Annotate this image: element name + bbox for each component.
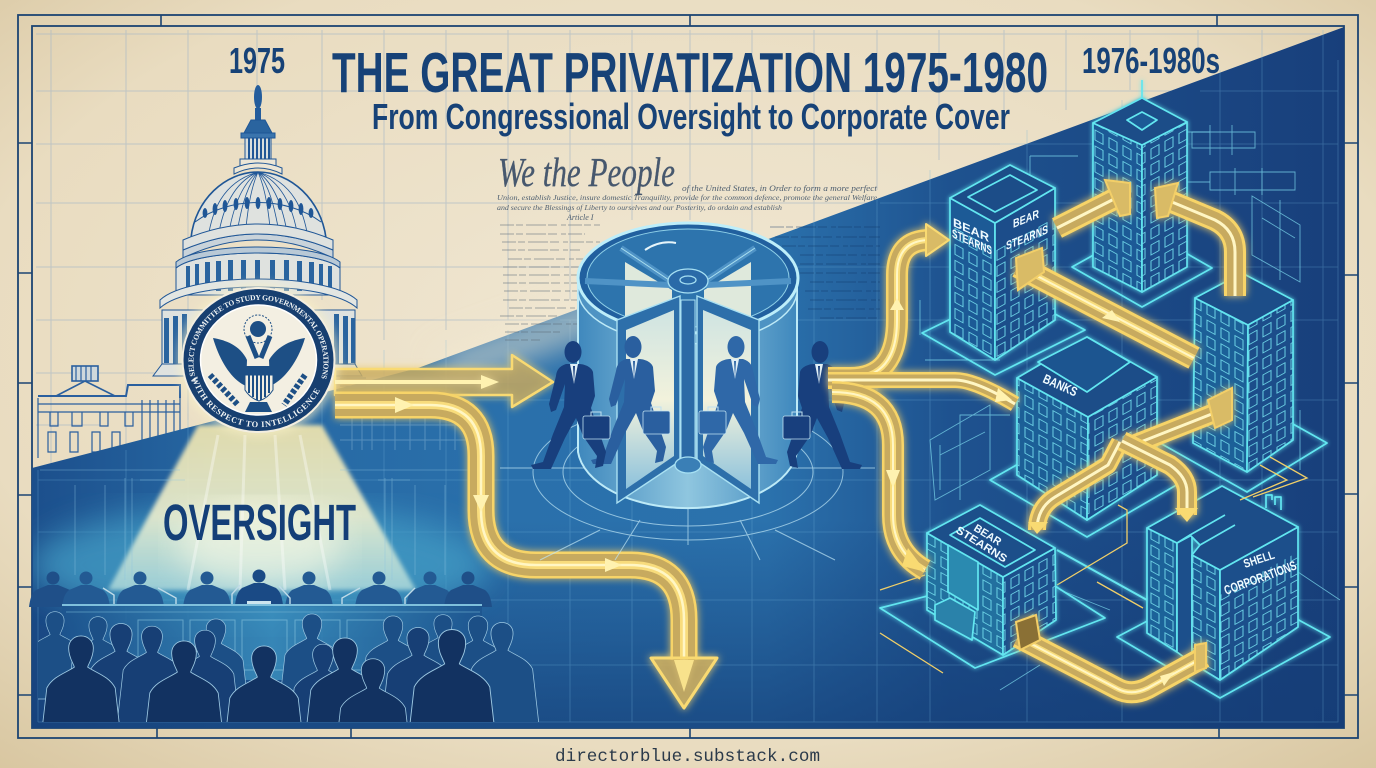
building: Bear Stearns upper bbox=[922, 165, 1085, 375]
document script lines: Article I bbox=[566, 213, 594, 222]
subtitle: From Congressional Oversight to Corporate Cover bbox=[372, 96, 1010, 137]
main dome bbox=[153, 172, 366, 386]
document script lines: and secure the Blessings of Liberty to ourselves and our Posterity, do ordain and establish bbox=[497, 203, 782, 212]
left door wing bbox=[617, 296, 680, 503]
label: Bear Stearns right face: BEAR bbox=[1013, 207, 1039, 231]
revolving door bbox=[500, 223, 875, 560]
seal ring text: WITH RESPECT TO INTELLIGENCE bbox=[192, 376, 320, 428]
OVERSIGHT label: OVERSIGHT bbox=[163, 494, 356, 551]
document script lines: Union, establish Justice, insure domestic Tranquility, provide for the common defence, promote the general Welfare bbox=[497, 193, 878, 202]
man exiting door bbox=[783, 341, 862, 469]
middle row bbox=[90, 623, 442, 722]
arrow: Banks to Shell bbox=[1122, 441, 1198, 522]
label: Bear lower: BEAR bbox=[971, 522, 1003, 548]
label: Banks: BANKS bbox=[1041, 371, 1080, 399]
cream fade along diagonal bbox=[440, 262, 740, 372]
seal ring text bbox=[188, 295, 328, 428]
building: Shell Corporations bbox=[1117, 486, 1330, 698]
document script lines: of the United States, in Order to form a more perfect bbox=[682, 184, 878, 193]
audience silhouettes bbox=[38, 611, 539, 722]
label: Stearns right face: STEARNS bbox=[1006, 222, 1048, 253]
year label 1975: 1975 bbox=[229, 40, 285, 81]
document script lines bbox=[497, 184, 880, 340]
seal ring text: A SELECT COMMITTEE TO STUDY GOVERNMENTAL OPERATIONS bbox=[188, 295, 328, 382]
man inside right bbox=[699, 336, 778, 464]
colonnade ghost behind blue bbox=[340, 410, 470, 450]
cyan and thin gold connector lines bbox=[880, 457, 1307, 673]
arrow: right tower to Bear Stearns bbox=[1016, 248, 1194, 358]
arrow: Banks to lower Bear Stearns bbox=[1028, 442, 1120, 534]
year label 1976-1980s: 1976-1980s bbox=[1082, 40, 1220, 81]
arrow: seal downward path bbox=[335, 397, 717, 708]
label: Shell: SHELL bbox=[1242, 548, 1276, 571]
committee panel silhouettes bbox=[29, 570, 492, 607]
right door wing bbox=[697, 296, 759, 503]
document: We the People bbox=[497, 149, 880, 340]
arrow: seal to revolving door bbox=[335, 355, 553, 407]
chairman bbox=[235, 570, 283, 606]
building blueprint details bbox=[920, 125, 1340, 690]
label: Corporations: CORPORATIONS bbox=[1222, 558, 1299, 598]
man entering door bbox=[531, 341, 610, 469]
label: Stearns left face: STEARNS bbox=[952, 227, 992, 258]
spotlight beam bbox=[108, 425, 416, 590]
arrow to lower Bear Stearns bbox=[832, 392, 926, 572]
government seal bbox=[171, 276, 346, 436]
door hubs bbox=[668, 269, 708, 473]
building: tower top bbox=[1072, 80, 1212, 307]
cylinder body bbox=[578, 278, 797, 508]
seal eagle bbox=[210, 315, 305, 412]
capitol wing bbox=[38, 366, 180, 458]
title: THE GREAT PRIVATIZATION 1975-1980 bbox=[332, 41, 1048, 105]
centre post bbox=[681, 300, 695, 462]
capitol building bbox=[153, 85, 366, 386]
tholos bbox=[234, 120, 282, 174]
cream blueprint grid bbox=[36, 30, 1320, 470]
arrows: between buildings bbox=[1016, 180, 1235, 692]
building: Bear Stearns lower bbox=[880, 505, 1105, 668]
label: Bear Stearns left face: BEAR bbox=[953, 216, 989, 245]
building: right tower bbox=[1160, 273, 1327, 492]
heading script: We the People bbox=[498, 149, 675, 195]
arrow: Bear Stearns to tower bbox=[1057, 180, 1130, 228]
hearing room wall panels bbox=[40, 470, 470, 580]
back row bbox=[24, 612, 539, 728]
front row bbox=[42, 629, 494, 722]
arrow: lower Bear Stearns to Shell bbox=[1016, 615, 1206, 692]
arrow to Banks bbox=[828, 380, 1015, 404]
arrow to Bear Stearns bbox=[828, 224, 949, 378]
back glass panels bbox=[625, 262, 672, 330]
arrow: right tower to top tower bbox=[1155, 183, 1235, 296]
arrow: right tower to Banks bbox=[1128, 388, 1232, 447]
room glow behind spotlight bbox=[30, 505, 490, 625]
label: Stearns lower: STEARNS bbox=[953, 524, 1009, 565]
hearing table bbox=[62, 605, 482, 680]
arrows: door to buildings bbox=[828, 224, 1015, 572]
statue on dome bbox=[254, 85, 262, 120]
building: Banks bbox=[990, 337, 1185, 537]
door floor plan rings bbox=[500, 404, 875, 560]
man inside left bbox=[591, 336, 670, 464]
microphones bbox=[103, 585, 415, 605]
source credit: directorblue.substack.com bbox=[555, 747, 820, 767]
top ring bbox=[578, 278, 797, 344]
